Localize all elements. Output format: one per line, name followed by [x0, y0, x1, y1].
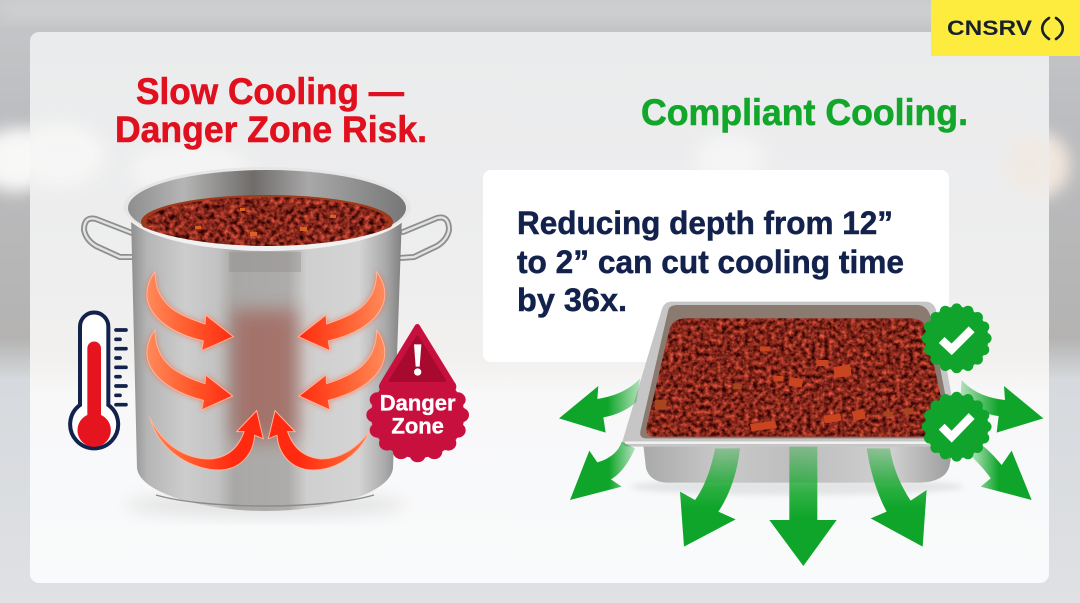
logo badge: CNSRV: [947, 17, 1032, 40]
left upper arrow: [559, 378, 640, 433]
title: slow cooling: Danger Zone Risk.: [115, 108, 427, 150]
left middle arrow: [147, 330, 233, 410]
right upper arrow: [961, 380, 1043, 433]
callout card: [483, 170, 949, 362]
pot body: [131, 215, 402, 511]
callout card: to 2” can cut cooling time: [517, 244, 904, 280]
down arrow center: [769, 447, 837, 566]
danger zone badge: Danger: [380, 391, 456, 416]
left bottom arrow: [149, 411, 263, 470]
right top arrow: [298, 272, 385, 351]
heat arrows: [147, 272, 385, 470]
stock pot: [84, 167, 449, 517]
pan chili: [646, 318, 948, 437]
title: slow cooling: Slow Cooling —: [136, 70, 404, 112]
check badge bottom: [922, 392, 992, 462]
callout card: Reducing depth from 12”: [517, 205, 893, 241]
down arrow right: [867, 448, 927, 547]
left top arrow: [147, 272, 233, 351]
pot handles: [84, 218, 449, 258]
danger zone badge: [366, 327, 469, 462]
chili in pot: [141, 195, 393, 249]
down arrow left: [680, 448, 740, 547]
pan rim: [622, 302, 959, 447]
pan wall: [643, 445, 953, 483]
logo badge: [931, 0, 1080, 56]
cooling arrows: [559, 378, 1043, 566]
thermometer icon: [70, 312, 126, 448]
check badges: [922, 303, 992, 462]
check badge top: [922, 303, 992, 373]
right middle arrow: [299, 330, 385, 410]
callout card: by 36x.: [517, 282, 627, 318]
right lower arrow: [972, 443, 1032, 500]
hotel pan: [622, 302, 963, 495]
pot rim and interior: [123, 167, 411, 249]
right bottom arrow: [268, 411, 370, 470]
left lower arrow: [570, 442, 635, 500]
title: compliant cooling: Compliant Cooling.: [641, 91, 968, 133]
danger zone badge: Zone: [391, 413, 444, 438]
title: slow cooling: [115, 70, 427, 150]
